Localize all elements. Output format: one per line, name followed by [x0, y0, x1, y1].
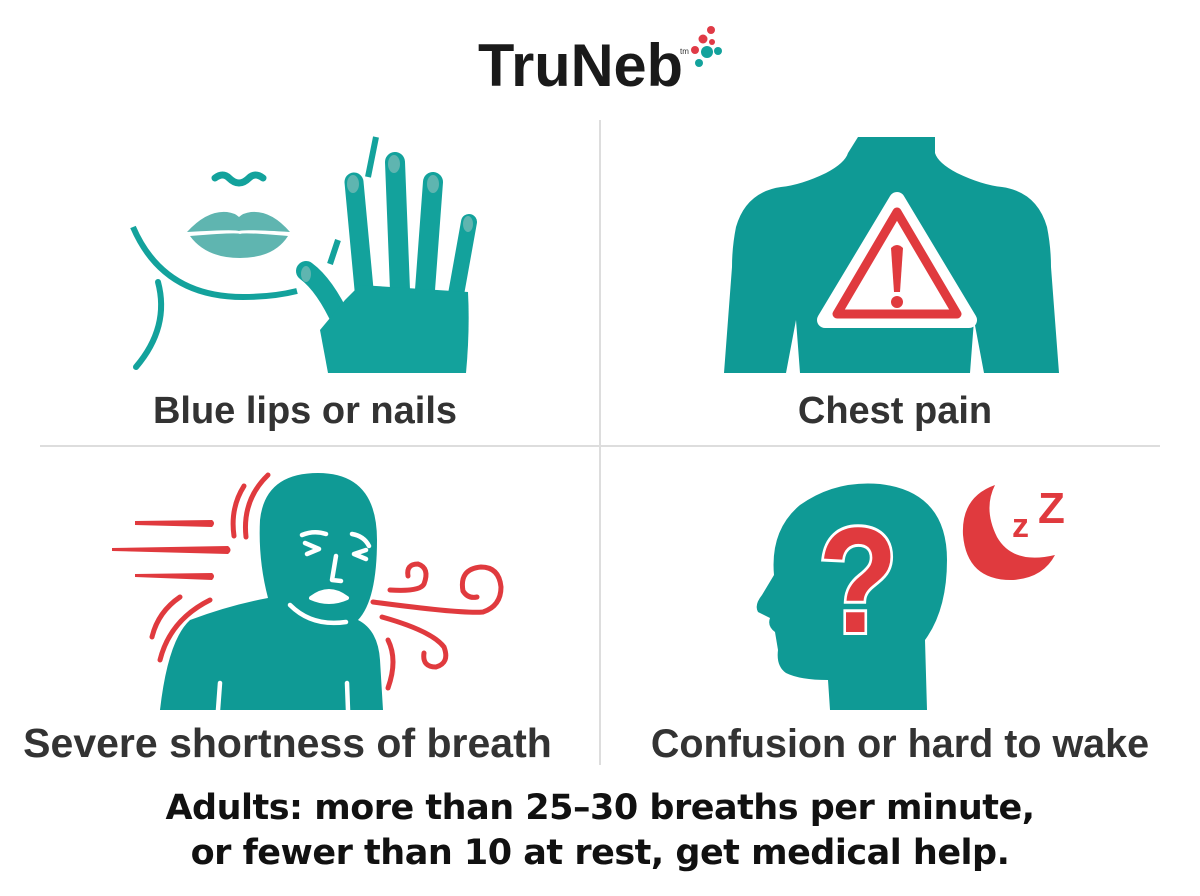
logo: tm [680, 47, 689, 56]
icon: lips and hand [130, 136, 477, 373]
icon: confused head with moon: Z [1038, 484, 1065, 533]
footer note [165, 788, 1035, 873]
label: blue lips: Blue lips or nails [153, 390, 457, 432]
footer note: Adults: more than 25–30 breaths per minute, [165, 788, 1035, 828]
icon: confused head with moon: z [1012, 507, 1029, 545]
label: confusion: Confusion or hard to wake [651, 722, 1149, 766]
logo: TruNeb [478, 32, 683, 99]
label: chest pain: Chest pain [798, 390, 992, 432]
label: shortness of breath: Severe shortness of breath [23, 720, 552, 766]
icon: chest with warning [724, 137, 1059, 373]
icon: confused head with moon [756, 484, 1065, 710]
dividers [599, 120, 601, 765]
icon: short of breath person [112, 472, 504, 710]
footer note: or fewer than 10 at rest, get medical help. [191, 833, 1009, 873]
icon: confused head with moon: ? [818, 496, 898, 664]
